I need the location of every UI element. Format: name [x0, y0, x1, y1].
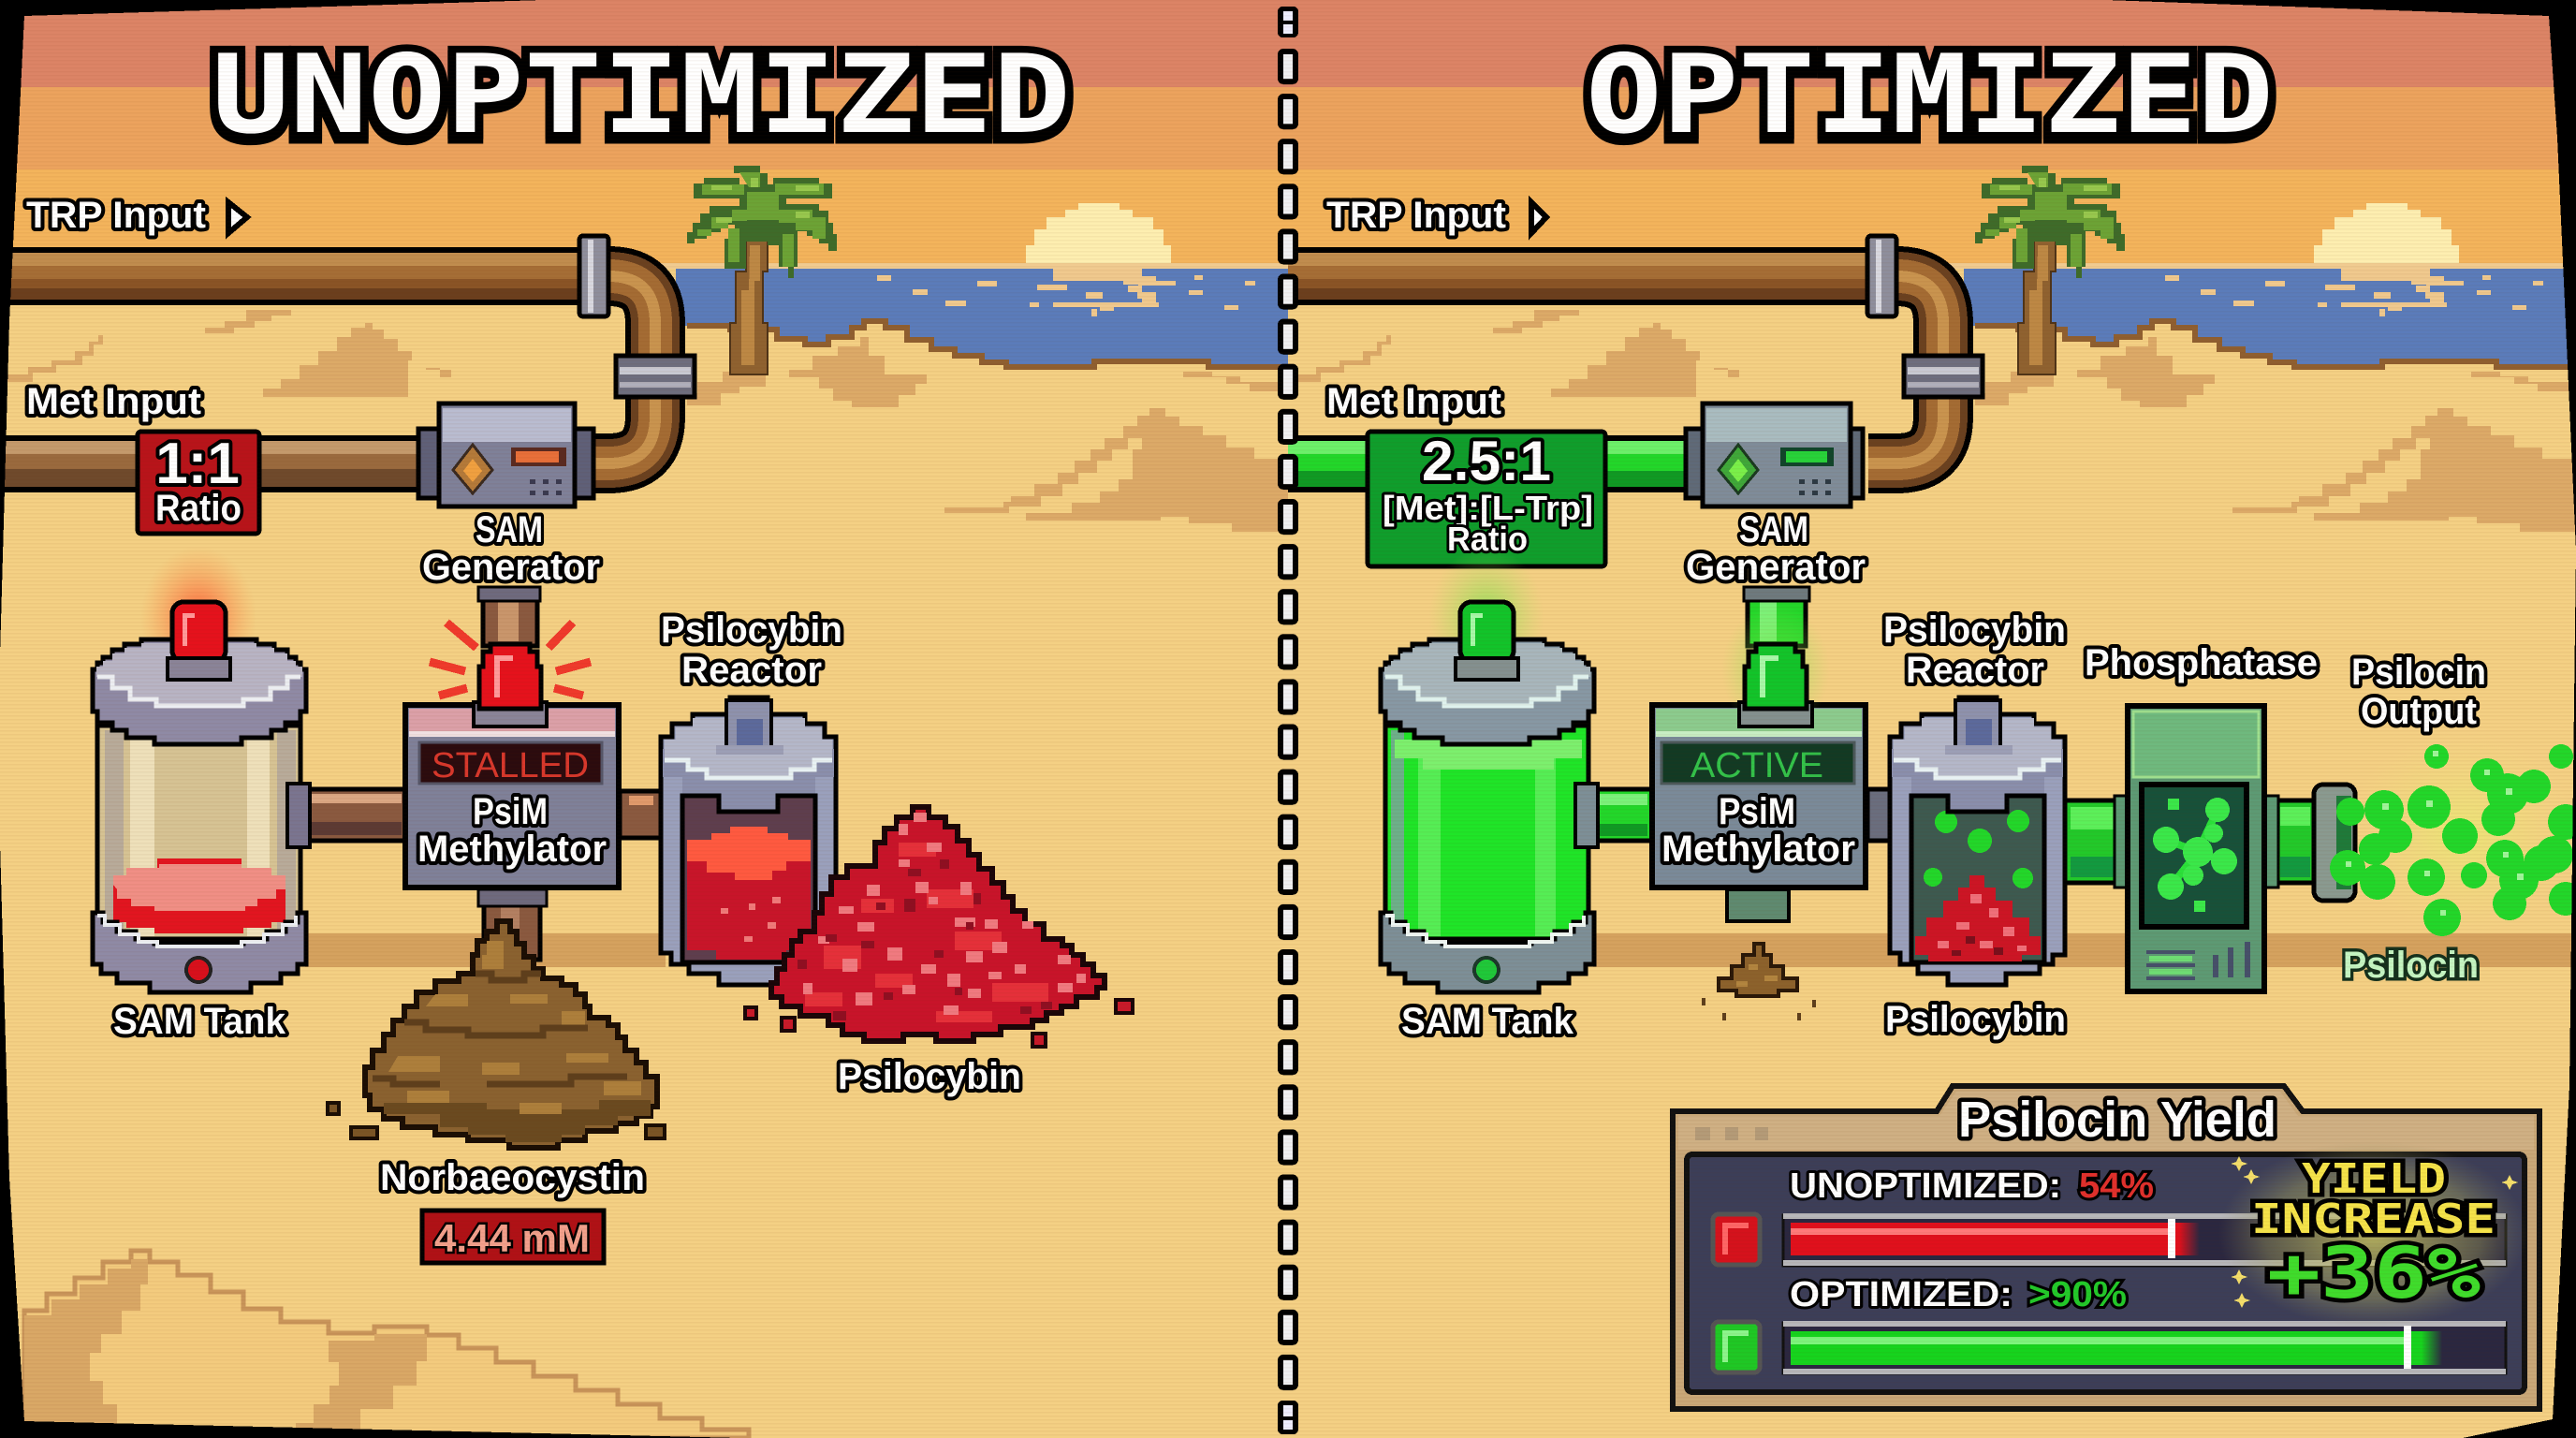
label: SAM tank: SAM Tank — [113, 1001, 286, 1042]
label: SAM tank: SAM Tank — [1401, 1001, 1574, 1042]
label: PsiM methylator — [417, 791, 607, 870]
unoptimized status light — [1713, 1214, 1760, 1265]
panel: psilocin yield — [1673, 1086, 2539, 1409]
Met pipe — [0, 435, 421, 492]
label: SAM generator: Generator — [1686, 547, 1866, 588]
optimized bar — [1783, 1321, 2506, 1374]
panel: optimized — [1288, 32, 2576, 1409]
label: PsiM methylator: PsiM — [473, 791, 548, 832]
shelf band right — [1593, 933, 2576, 967]
label: norbaeocystin: Norbaeocystin — [380, 1157, 645, 1198]
active green light — [1721, 604, 1830, 735]
label: psilocin output — [2351, 652, 2486, 732]
status: active: ACTIVE — [1690, 746, 1823, 785]
Psilocybin reactor — [661, 697, 836, 985]
row: unoptimized label: UNOPTIMIZED: — [1790, 1167, 2061, 1206]
SAM tank — [1381, 547, 1594, 992]
TRP pipe — [1288, 236, 1983, 463]
label: psilocybin: Psilocybin — [838, 1056, 1021, 1097]
value badge: 4.44 mM: 4.44 mM — [434, 1216, 590, 1260]
ratio badge — [1368, 430, 1605, 566]
Met pipe green — [1288, 435, 1691, 492]
label: PsiM methylator: PsiM — [1719, 791, 1795, 832]
ratio badge: Ratio — [155, 488, 242, 529]
label: psilocybin reactor: Reactor — [1906, 650, 2044, 691]
psilocybin pile — [745, 807, 1133, 1047]
callout: yield increase — [2218, 1140, 2527, 1328]
ratio badge: 1:1 — [155, 432, 240, 496]
optimized status light — [1713, 1322, 1760, 1372]
status: stalled: STALLED — [432, 746, 589, 785]
window buttons — [1695, 1127, 1768, 1140]
label: psilocybin reactor: Psilocybin — [1883, 609, 2066, 651]
pipe: generator to methylator — [1744, 587, 1809, 646]
label: Met input: Met Input — [1326, 381, 1501, 422]
row: optimized label: OPTIMIZED: — [1790, 1275, 2012, 1314]
pipe: methylator to norbaeocystin — [484, 894, 540, 960]
TRP pipe — [0, 236, 695, 463]
title: optimized: OPTIMIZED — [1586, 32, 2274, 158]
psilocin particles — [2314, 730, 2576, 936]
ratio badge — [138, 432, 259, 534]
unoptimized bar — [1783, 1213, 2506, 1266]
SAM tank — [93, 547, 306, 992]
callout: yield increase: +36% — [2267, 1231, 2481, 1314]
label: psilocybin reactor: Reactor — [681, 650, 822, 691]
ratio badge: Ratio — [1447, 520, 1528, 558]
label: PsiM methylator: Methylator — [417, 829, 607, 870]
pipe: tank to methylator — [287, 784, 406, 847]
ratio badge: 2.5:1 — [1422, 430, 1551, 492]
label: SAM generator — [422, 509, 600, 588]
PsiM methylator — [1652, 705, 1866, 921]
SAM generator — [1686, 404, 1863, 506]
pipe: methylator to reactor — [1867, 789, 1895, 841]
pipe: generator to methylator — [478, 587, 540, 646]
alarm light with rays — [430, 623, 591, 726]
callout: yield increase: YIELD — [2302, 1155, 2446, 1203]
pipe: methylator to reactor — [620, 791, 663, 838]
SAM generator — [418, 404, 593, 506]
small norbaeocystin pile — [1702, 944, 1816, 1020]
label: psilocybin reactor: Psilocybin — [661, 609, 842, 651]
label: psilocin: Psilocin — [2343, 945, 2479, 986]
background scene: right desert beach — [1288, 0, 2576, 1438]
label: SAM generator — [1686, 509, 1866, 588]
dune at bottom left — [24, 1251, 749, 1438]
label: psilocin output: Output — [2361, 691, 2477, 732]
panel: unoptimized — [0, 32, 1133, 1263]
background scene: left desert beach — [0, 0, 1288, 1438]
label: SAM generator: Generator — [422, 547, 600, 588]
label: psilocybin: Psilocybin — [1885, 999, 2066, 1040]
divider — [1278, 7, 1298, 1434]
pipe: tank to methylator — [1575, 784, 1652, 847]
label: SAM generator: SAM — [476, 509, 543, 550]
label: phosphatase: Phosphatase — [2085, 642, 2318, 683]
phosphatase unit — [2128, 706, 2264, 991]
row: optimized label — [1790, 1275, 2127, 1314]
label: PsiM methylator — [1661, 791, 1855, 870]
Psilocybin reactor — [1890, 697, 2065, 985]
label: TRP input: TRP Input — [26, 195, 206, 236]
callout: yield increase: INCREASE — [2251, 1196, 2496, 1243]
label: TRP input: TRP Input — [1326, 195, 1506, 236]
label: psilocybin reactor — [1883, 609, 2066, 691]
row: unoptimized label: 54% — [2079, 1167, 2154, 1206]
panel title: Psilocin Yield — [1958, 1092, 2276, 1148]
label: psilocin output: Psilocin — [2351, 652, 2486, 693]
label: psilocybin reactor — [661, 609, 842, 691]
label: PsiM methylator: Methylator — [1661, 829, 1855, 870]
norbaeocystin pile — [328, 921, 665, 1148]
shelf band left — [305, 933, 666, 967]
ratio badge: [Met]:[L-Trp] — [1383, 489, 1593, 527]
title: unoptimized: UNOPTIMIZED — [212, 32, 1071, 158]
label: Met input: Met Input — [26, 381, 201, 422]
PsiM methylator — [405, 705, 619, 906]
pipes around phosphatase — [2065, 796, 2318, 888]
label: SAM generator: SAM — [1739, 509, 1808, 550]
row: optimized label: >90% — [2028, 1275, 2127, 1314]
